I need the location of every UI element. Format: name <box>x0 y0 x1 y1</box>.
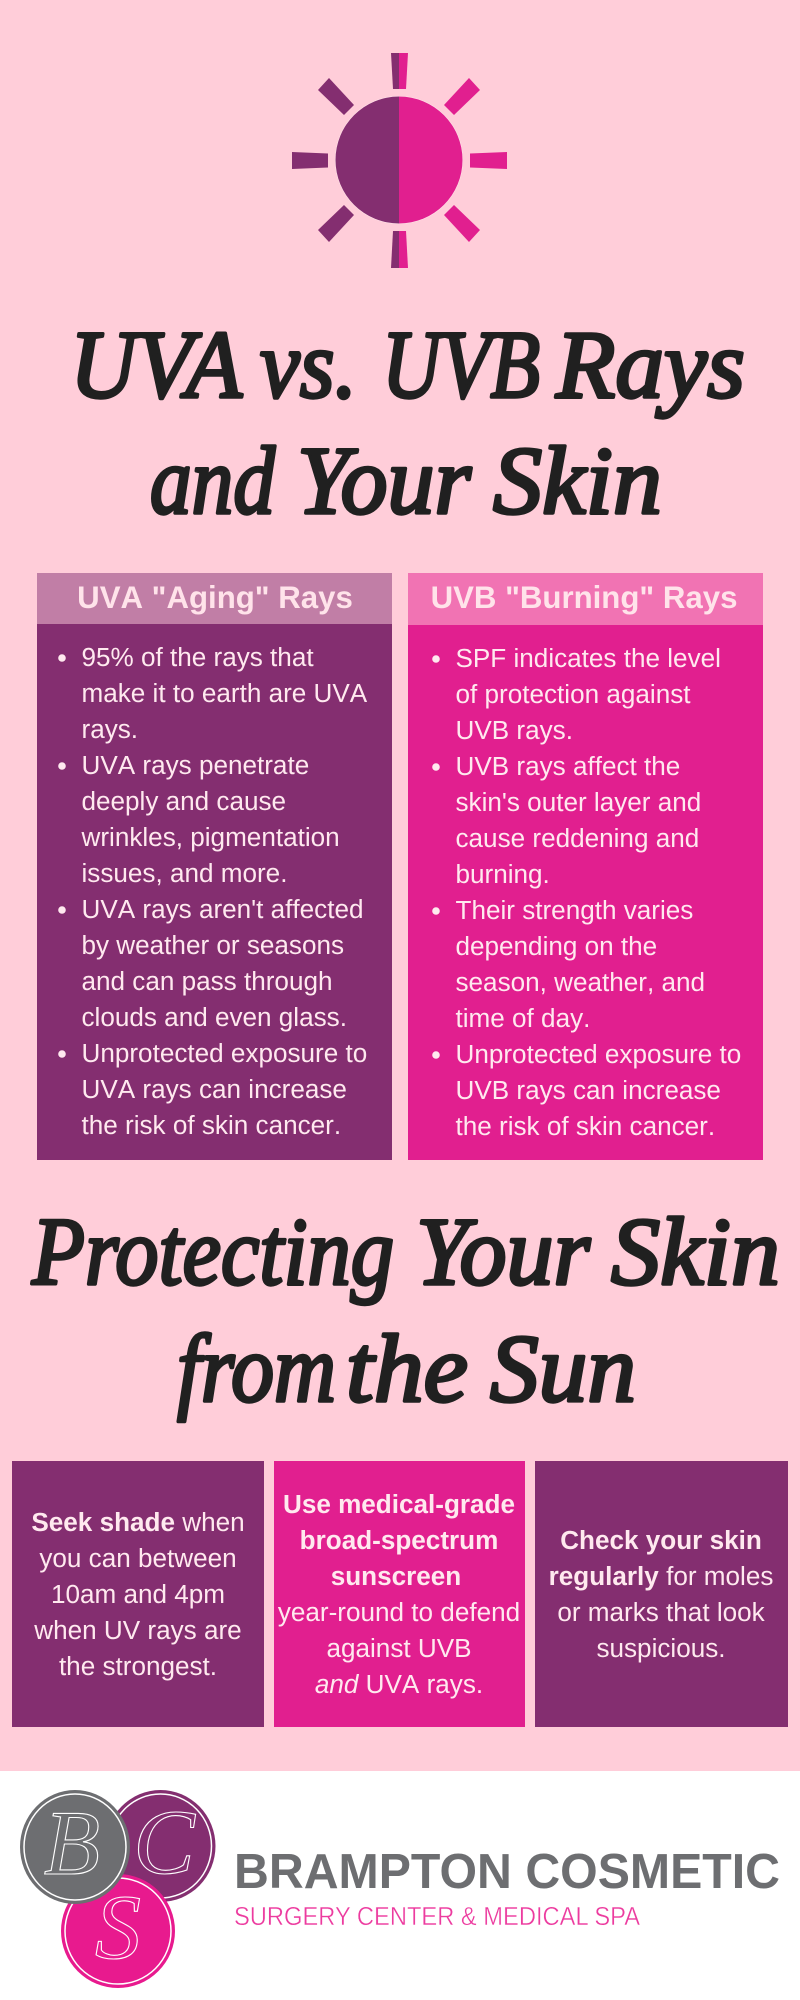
bullet list: UVB facts: skin's outer layer and <box>456 787 701 817</box>
logo: Brampton Cosmetic monogram circles <box>20 1790 216 1988</box>
bullet list: UVB facts <box>432 643 741 1141</box>
bullet list: UVA facts: rays. <box>82 714 138 744</box>
bullet list: UVA facts: the risk of skin cancer. <box>82 1110 341 1140</box>
heading: Protecting Your Skin from the Sun: Skin <box>611 1198 780 1305</box>
logo circle S: S <box>95 1876 141 1978</box>
title: UVA vs. UVB Rays and Your Skin: UVB <box>382 311 540 418</box>
bullet list: UVB facts: time of day. <box>456 1003 590 1033</box>
panel header: UVA: UVA "Aging" Rays <box>77 580 353 615</box>
panel: sunscreen: sunscreen <box>331 1561 461 1591</box>
bullet list: UVB facts: season, weather, and <box>456 967 705 997</box>
brand name: BRAMPTON COSMETIC <box>234 1845 780 1899</box>
bullet list: UVB facts: UVB rays. <box>456 715 573 745</box>
heading: Protecting Your Skin from the Sun: from <box>177 1315 336 1422</box>
heading: Protecting Your Skin from the Sun <box>31 1198 780 1422</box>
logo circle C: C <box>133 1791 196 1893</box>
title: UVA vs. UVB Rays and Your Skin: UVA <box>70 311 242 418</box>
logo circle C <box>106 1790 216 1902</box>
title: UVA vs. UVB Rays and Your Skin: Skin <box>493 427 662 534</box>
bullet list: UVA facts: deeply and cause <box>82 786 286 816</box>
bullet list: UVB facts: Unprotected exposure to <box>456 1039 741 1069</box>
footer band <box>0 1771 800 2000</box>
panel: sunscreen: against UVB <box>326 1633 472 1663</box>
bullet list: UVB facts: the risk of skin cancer. <box>456 1111 715 1141</box>
brand tagline: SURGERY CENTER & MEDICAL SPA <box>234 1901 641 1931</box>
bullet list: UVA facts: issues, and more. <box>82 858 287 888</box>
panel: seek shade: Seek shade when <box>31 1507 245 1537</box>
icon: half purple half pink sun <box>292 53 507 268</box>
heading: Protecting Your Skin from the Sun: Sun <box>490 1315 636 1422</box>
panel: sunscreen <box>274 1461 525 1727</box>
bullet list: UVA facts: 95% of the rays that <box>82 642 314 672</box>
heading: Protecting Your Skin from the Sun: the <box>346 1315 468 1422</box>
logo circle B <box>20 1790 130 1904</box>
bullet list: UVA facts: UVA rays can increase <box>82 1074 347 1104</box>
heading: Protecting Your Skin from the Sun: Protecting <box>31 1198 394 1305</box>
bullet list: UVB facts: UVB rays can increase <box>456 1075 721 1105</box>
sun disc <box>335 96 463 224</box>
bullet list: UVA facts <box>58 642 368 1140</box>
panel: seek shade: 10am and 4pm <box>51 1579 225 1609</box>
bullet list: UVB facts: Their strength varies <box>456 895 693 925</box>
panel: sunscreen: and UVA rays. <box>315 1669 483 1699</box>
panel: sunscreen: year-round to defend <box>278 1597 520 1627</box>
panel: seek shade: you can between <box>39 1543 237 1573</box>
title: UVA vs. UVB Rays and Your Skin <box>70 311 745 534</box>
title: UVA vs. UVB Rays and Your Skin: Your <box>297 427 472 534</box>
panel: check your skin <box>535 1461 788 1727</box>
panel: check your skin: suspicious. <box>596 1633 726 1663</box>
title: UVA vs. UVB Rays and Your Skin: Rays <box>555 311 745 418</box>
bullet list: UVA facts: by weather or seasons <box>82 930 344 960</box>
panel: check your skin: regularly for moles <box>549 1561 773 1591</box>
bullet list: UVB facts: UVB rays affect the <box>456 751 680 781</box>
panel: UVA aging rays <box>37 573 392 1160</box>
sun rays <box>292 53 507 268</box>
panel: check your skin: or marks that look <box>557 1597 766 1627</box>
panel: seek shade: the strongest. <box>59 1651 217 1681</box>
panel header: UVA <box>37 573 392 624</box>
title: UVA vs. UVB Rays and Your Skin: and <box>150 427 276 534</box>
panel: seek shade: when UV rays are <box>33 1615 242 1645</box>
bullet list: UVA facts: UVA rays aren't affected <box>82 894 364 924</box>
bullet list: UVA facts: wrinkles, pigmentation <box>80 822 340 852</box>
heading: Protecting Your Skin from the Sun: Your <box>416 1198 591 1305</box>
panel: sunscreen: Use medical-grade <box>283 1489 515 1519</box>
panel: UVB burning rays <box>408 573 763 1160</box>
bullet list: UVA facts: and can pass through <box>82 966 332 996</box>
panel: seek shade <box>12 1461 264 1727</box>
bullet list: UVB facts: SPF indicates the level <box>456 643 721 673</box>
panel: check your skin: Check your skin <box>560 1525 762 1555</box>
title: UVA vs. UVB Rays and Your Skin: vs. <box>260 311 357 418</box>
bullet list: UVB facts: cause reddening and <box>456 823 699 853</box>
panel header: UVB <box>408 573 763 625</box>
bullet list: UVB facts: burning. <box>456 859 550 889</box>
panel: sunscreen: broad-spectrum <box>300 1525 498 1555</box>
bullet list: UVA facts: clouds and even glass. <box>82 1002 347 1032</box>
bullet list: UVB facts: depending on the <box>456 931 657 961</box>
panel header: UVB: UVB "Burning" Rays <box>431 580 737 615</box>
logo circle S <box>61 1874 175 1988</box>
bullet list: UVA facts: Unprotected exposure to <box>82 1038 367 1068</box>
logo circle B: B <box>44 1792 100 1894</box>
bullet list: UVA facts: UVA rays penetrate <box>82 750 309 780</box>
bullet list: UVA facts: make it to earth are UVA <box>82 678 368 708</box>
bullet list: UVB facts: of protection against <box>456 679 691 709</box>
